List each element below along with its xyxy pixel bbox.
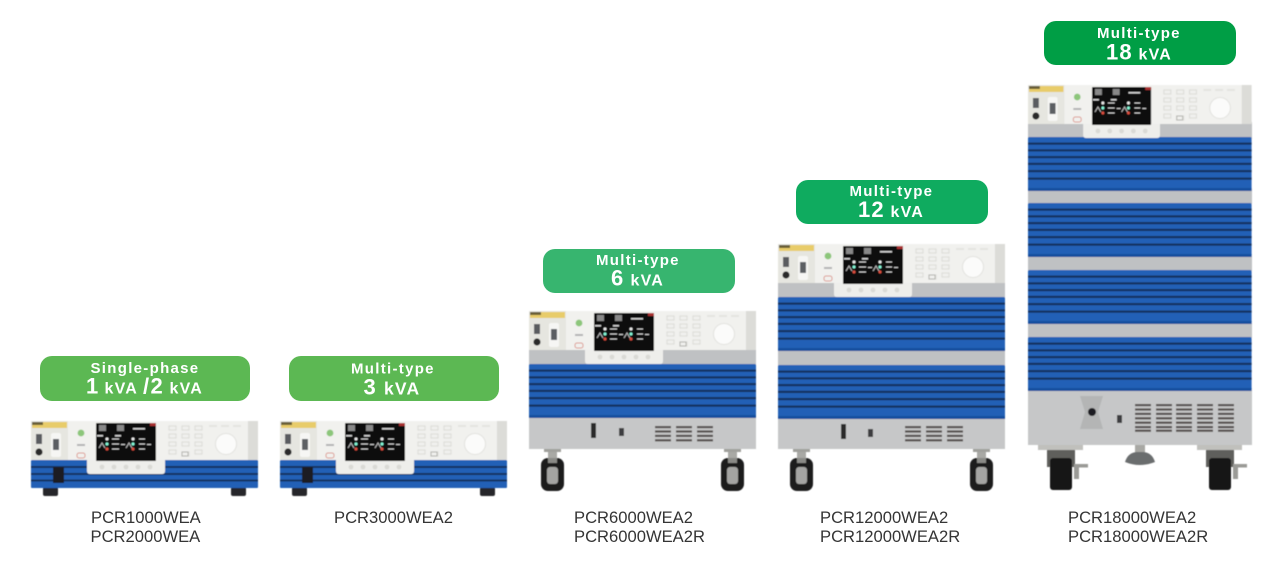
badge: Multi-type 3 kVA [289,356,499,401]
badge: Multi-type 3 kVA: kVA [384,378,420,398]
badge: Single-phase 1 kVA / 2 kVA [40,356,250,401]
badge: Single-phase 1 kVA / 2 kVA: / [143,374,150,398]
unit: PCR12000WEA2 [778,244,1005,491]
label: PCR6000WEA2 / PCR6000WEA2R: PCR6000WEA2 [574,508,693,527]
label: PCR6000WEA2 / PCR6000WEA2R: PCR6000WEA2R [574,527,705,546]
label: PCR1000WEA / PCR2000WEA: PCR1000WEA [91,508,202,527]
label: PCR12000WEA2 / PCR12000WEA2R: PCR12000WEA2R [820,527,960,546]
badge: Multi-type 6 kVA [543,249,735,293]
label: PCR18000WEA2 / PCR18000WEA2R: PCR18000WEA2 [1068,508,1196,527]
label: PCR1000WEA / PCR2000WEA: PCR2000WEA [90,527,201,546]
label: PCR1000WEA / PCR2000WEA [90,508,202,546]
badge: Multi-type 12 kVA [796,180,988,224]
label: PCR18000WEA2 / PCR18000WEA2R [1068,508,1208,546]
badge: Multi-type 18 kVA: 18 [1106,39,1133,64]
badge: Multi-type 18 kVA: kVA [1138,46,1172,63]
badge: Multi-type 6 kVA: kVA [630,272,664,289]
badge: Multi-type 6 kVA: Multi-type [596,252,680,269]
unit: PCR1000WEA / PCR2000WEA [31,421,258,496]
badge: Single-phase 1 kVA / 2 kVA: kVA [104,380,138,398]
badge: Multi-type 18 kVA [1044,21,1236,65]
unit: PCR18000WEA2 [1028,85,1252,490]
label: PCR6000WEA2 / PCR6000WEA2R [574,508,705,546]
badge: Multi-type 12 kVA: Multi-type [850,183,933,200]
badge: Single-phase 1 kVA / 2 kVA: kVA [170,380,203,398]
badge: Multi-type 6 kVA: 6 [611,265,624,290]
label: PCR18000WEA2 / PCR18000WEA2R: PCR18000WEA2R [1068,527,1208,546]
badge: Multi-type 12 kVA: 12 [858,197,885,222]
badge: Single-phase 1 kVA / 2 kVA: Single-phase [90,360,199,377]
label: PCR3000WEA2: PCR3000WEA2 [334,508,453,527]
badge: Single-phase 1 kVA / 2 kVA: 2 [150,374,164,398]
badge: Single-phase 1 kVA / 2 kVA: 1 [86,374,99,398]
badge: Multi-type 12 kVA: kVA [890,204,924,221]
badge: Multi-type 18 kVA: Multi-type [1097,25,1181,42]
unit: PCR3000WEA2 [280,421,507,496]
label: PCR12000WEA2 / PCR12000WEA2R [820,508,960,546]
badge: Multi-type 3 kVA: Multi-type [351,360,435,377]
unit: PCR6000WEA2 [529,311,756,491]
badge: Multi-type 3 kVA: 3 [364,374,377,399]
label: PCR12000WEA2 / PCR12000WEA2R: PCR12000WEA2 [820,508,948,527]
